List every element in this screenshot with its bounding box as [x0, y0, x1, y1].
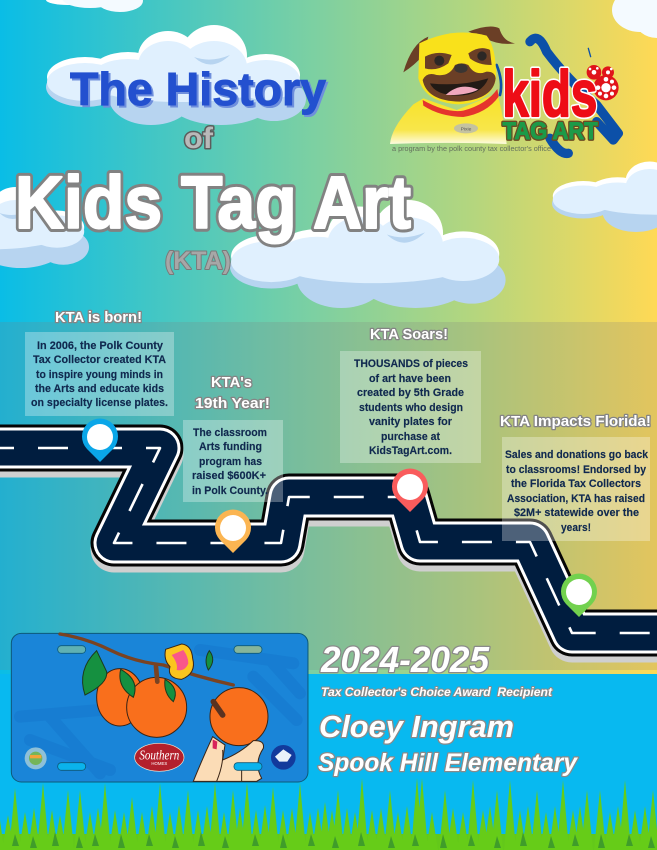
logo: Kids Tag Art pug — [390, 26, 619, 153]
plate top slots — [58, 646, 262, 653]
logo: kids wordmark: kids — [502, 57, 597, 130]
leaves — [83, 651, 213, 702]
body text: vanity plates for — [369, 416, 453, 428]
pin: green — [561, 574, 597, 617]
body text — [354, 358, 468, 457]
background: lower blue band — [0, 674, 657, 850]
heading: KTA Soars! — [370, 326, 448, 343]
logo: pug ears — [403, 26, 515, 72]
heading — [195, 374, 270, 412]
badge: right seal — [271, 745, 296, 770]
heading: 19th Year! — [195, 395, 270, 412]
cloud: behind history title — [46, 25, 306, 125]
sponsor badge: Southern Homes: Southern — [139, 747, 180, 762]
text box — [183, 420, 283, 502]
logo: pug head — [418, 33, 496, 104]
logo: name tag — [454, 123, 478, 133]
milestone: 19th year — [183, 374, 283, 502]
school name: Spook Hill Elementary — [318, 749, 578, 777]
body text: $2M+ statewide over the — [514, 507, 639, 519]
body text: created by 5th Grade — [357, 387, 464, 399]
grass — [0, 778, 657, 850]
logo: flower — [587, 65, 619, 100]
timeline panel overlay — [0, 322, 657, 670]
text box — [502, 437, 650, 541]
body text: In 2006, the Polk County — [37, 340, 164, 352]
body text: of art have been — [369, 373, 451, 385]
grass: dark shadow tufts — [12, 832, 655, 848]
sponsor badge: Southern Homes — [135, 743, 184, 771]
milestone: KTA soars — [340, 326, 481, 463]
pin: blue — [82, 419, 118, 462]
body text: the Florida Tax Collectors — [511, 478, 641, 490]
grass: base — [0, 834, 657, 850]
plate brush texture — [20, 650, 300, 773]
pin: red — [392, 469, 428, 512]
milestone: KTA is born — [25, 309, 174, 416]
heading: KTA Impacts Florida! — [500, 413, 651, 430]
body text: students who design — [359, 402, 463, 414]
heading: The History: The History — [72, 65, 328, 117]
body text: to inspire young minds in — [36, 369, 163, 381]
pin: orange — [215, 510, 251, 553]
body text: The classroom — [193, 427, 267, 439]
road — [0, 448, 657, 639]
heading: KTA's — [211, 374, 252, 391]
body text: KidsTagArt.com. — [369, 445, 452, 457]
plate body — [11, 633, 308, 782]
cloud: large lower — [230, 200, 506, 308]
heading: (KTA): (KTA) — [165, 247, 231, 275]
hand — [193, 737, 264, 781]
logo: tag art wordmark: TAG ART — [503, 118, 598, 145]
logo: pug body — [390, 93, 507, 144]
text box — [25, 332, 174, 416]
body text — [505, 449, 649, 534]
title block — [15, 63, 411, 275]
logo: red collar — [423, 89, 499, 117]
oranges — [97, 669, 268, 746]
body text: Association, KTA has raised — [507, 493, 645, 505]
body text — [192, 427, 268, 497]
body text: Sales and donations go back — [505, 449, 649, 461]
award text — [318, 639, 578, 777]
body text: THOUSANDS of pieces — [354, 358, 468, 370]
body text: the Arts and educate kids — [35, 383, 164, 395]
heading: Kids Tag Art: Kids Tag Art — [15, 161, 411, 244]
body text — [31, 340, 168, 409]
heading: KTA is born! — [55, 309, 142, 326]
flower — [165, 644, 193, 679]
logo: tag art wordmark: TAG ART — [503, 118, 598, 145]
license plate — [11, 633, 308, 782]
body text: Tax Collector created KTA — [33, 354, 166, 366]
grass: blades — [0, 778, 657, 850]
text box — [340, 351, 481, 463]
body text: Arts funding — [199, 441, 262, 453]
heading: Kids Tag Art: Kids Tag Art — [15, 161, 411, 244]
body text: in Polk County. — [192, 485, 268, 497]
branch — [60, 634, 233, 715]
student name: Cloey Ingram — [319, 709, 514, 744]
sponsor badge: Southern Homes: HOMES — [151, 761, 167, 766]
logo: pug face — [423, 48, 496, 102]
background: sky gradient — [0, 0, 657, 674]
body text: purchase at — [381, 431, 440, 443]
logo: kids wordmark: kids — [502, 57, 597, 130]
cloud: top left — [46, 0, 143, 12]
body text: years! — [561, 522, 591, 534]
award name: Tax Collector's Choice Award Recipient — [321, 687, 553, 699]
award year: 2024-2025 — [320, 639, 490, 680]
cloud: left — [0, 187, 89, 268]
logo: name tag: Pixie — [461, 126, 472, 132]
cloud: right — [552, 157, 657, 232]
milestone: KTA impacts Florida — [500, 413, 651, 541]
body text: to classrooms! Endorsed by — [506, 464, 647, 476]
heading: of: of — [184, 122, 214, 155]
badge: left seal — [25, 747, 47, 769]
logo tagline: a program by the polk county tax collector's office — [392, 144, 551, 153]
logo: blue scribble — [497, 38, 618, 153]
heading: The History: The History — [70, 63, 326, 115]
body text: on specialty license plates. — [31, 397, 168, 409]
body text: program has — [199, 456, 262, 468]
cloud: top right — [612, 0, 657, 38]
body text: raised $600K+ — [192, 470, 266, 482]
plate bottom slots — [58, 763, 262, 770]
